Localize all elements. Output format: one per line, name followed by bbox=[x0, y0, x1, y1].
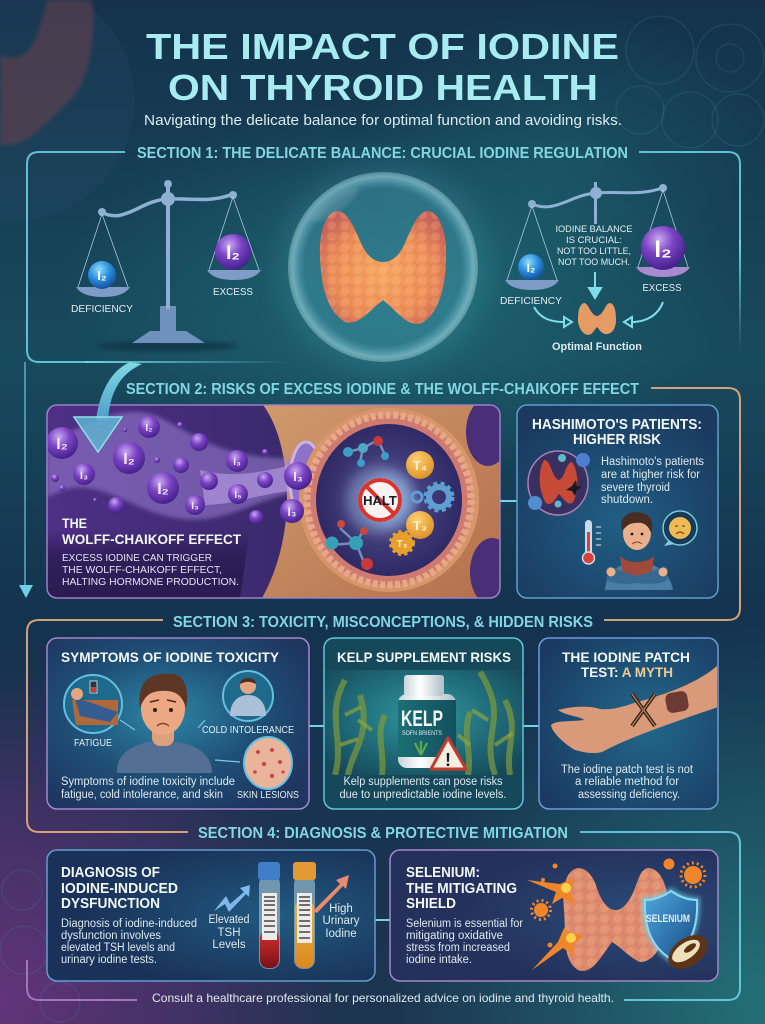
title bbox=[146, 26, 619, 108]
text: patch test description bbox=[561, 764, 694, 801]
text: Hashimoto's description: are at higher risk for bbox=[601, 469, 700, 481]
text: kelp description: due to unpredictable iodine levels. bbox=[340, 789, 506, 801]
text: diagnosis description: Diagnosis of iodine-induced bbox=[61, 918, 197, 930]
heading: patch test: THE IODINE PATCH bbox=[562, 649, 690, 665]
text: symptoms description: Symptoms of iodine toxicity include bbox=[61, 776, 235, 788]
section 3 heading: SECTION 3: TOXICITY, MISCONCEPTIONS, & HIDDEN RISKS bbox=[173, 614, 593, 631]
section 2 heading: SECTION 2: RISKS OF EXCESS IODINE & THE WOLFF-CHAIKOFF EFFECT bbox=[126, 381, 639, 398]
icon: fatigue bbox=[64, 675, 240, 762]
text: kelp description: Kelp supplements can pose risks bbox=[344, 776, 503, 788]
icon: iodine excess sphere bbox=[215, 234, 251, 270]
label: high urinary iodine: High bbox=[329, 903, 353, 915]
subtitle: Navigating the delicate balance for optimal function and avoiding risks. bbox=[144, 113, 622, 129]
icon: brazil nut bbox=[662, 928, 714, 976]
label: elevated TSH bbox=[208, 914, 250, 951]
panel: Wolff-Chaikoff effect: I₂ bbox=[56, 436, 68, 453]
panel: kelp supplement risks bbox=[324, 638, 523, 809]
iodine spheres bbox=[46, 416, 312, 524]
icon: selenium shield: SELENIUM bbox=[646, 913, 690, 925]
heading: diagnosis bbox=[61, 865, 178, 912]
icon: iodine deficiency sphere bbox=[88, 261, 116, 289]
footer note: Consult a healthcare professional for personalized advice on iodine and thyroid health. bbox=[152, 991, 614, 1005]
label: high urinary iodine bbox=[322, 903, 360, 940]
text: diagnosis description: dysfunction involves bbox=[61, 930, 161, 942]
panel: Hashimoto's patients bbox=[517, 405, 718, 598]
text: selenium description: stress from increased bbox=[406, 942, 510, 954]
icon: large excess sphere: I₂ bbox=[654, 236, 672, 263]
text: Wolff-Chaikoff description: HALTING HORMONE PRODUCTION. bbox=[62, 576, 239, 588]
panel: symptoms of iodine toxicity bbox=[47, 638, 309, 809]
label: elevated TSH: Levels bbox=[212, 939, 246, 951]
panel: Wolff-Chaikoff effect bbox=[46, 398, 514, 606]
panel: iodine patch test myth bbox=[539, 638, 718, 809]
connector bbox=[500, 500, 517, 502]
text: selenium description: iodine intake. bbox=[406, 954, 472, 966]
arrow: excess to thyroid bbox=[624, 302, 663, 327]
icon: warning triangle: ! bbox=[445, 750, 451, 770]
heading: selenium: THE MITIGATING bbox=[406, 881, 517, 897]
big arrow into section 2 bbox=[74, 362, 142, 452]
label: high urinary iodine: Urinary bbox=[322, 915, 360, 927]
illustration: kelp bottle under water: SOFN BRIENTS bbox=[402, 730, 443, 737]
text: Hashimoto's description: Hashimoto's patients bbox=[601, 456, 704, 468]
text: symptoms description: fatigue, cold intolerance, and skin bbox=[61, 789, 223, 801]
panel: Wolff-Chaikoff effect: I₃ bbox=[293, 469, 303, 484]
icon: blood test tube bbox=[258, 862, 280, 969]
section 3 frame bbox=[27, 620, 188, 832]
section 1 frame bbox=[27, 152, 740, 362]
icon: selenium shield bbox=[642, 887, 700, 963]
panel: Wolff-Chaikoff effect: I₅ bbox=[234, 490, 242, 501]
heading: Hashimoto's: HASHIMOTO'S PATIENTS: bbox=[532, 417, 702, 433]
icon: small deficiency sphere: I₂ bbox=[527, 261, 535, 275]
icon: high urinary arrow bbox=[313, 875, 349, 913]
heading: kelp: KELP SUPPLEMENT RISKS bbox=[337, 649, 511, 665]
heading: Hashimoto's: HIGHER RISK bbox=[573, 432, 661, 448]
icon: inflamed thyroid bbox=[528, 451, 590, 515]
arrow: balance to thyroid bbox=[589, 272, 601, 298]
icon: thermometer bbox=[582, 520, 601, 564]
heading: selenium bbox=[406, 865, 517, 912]
label: deficiency: DEFICIENCY bbox=[500, 296, 562, 307]
icon: elevated TSH arrow bbox=[214, 885, 250, 912]
connectors bbox=[309, 725, 539, 727]
callout: iodine balance: NOT TOO LITTLE, bbox=[557, 246, 631, 257]
text: selenium description: Selenium is essential for bbox=[406, 918, 523, 930]
text: Wolff-Chaikoff description bbox=[62, 552, 239, 588]
illustration: kelp bottle under water bbox=[325, 665, 522, 777]
icon: urine test tube bbox=[293, 862, 316, 969]
icon: warning triangle bbox=[431, 738, 466, 770]
callout: iodine balance bbox=[556, 224, 632, 268]
illustration: thyroid bbox=[563, 868, 668, 971]
icon: hormones and halt sign: HALT bbox=[363, 493, 397, 508]
label: excess: EXCESS bbox=[642, 283, 682, 294]
connector bbox=[375, 919, 390, 921]
label: high urinary iodine: Iodine bbox=[325, 928, 357, 940]
section 1 heading: SECTION 1: THE DELICATE BALANCE: CRUCIAL IODINE REGULATION bbox=[137, 145, 628, 162]
icon: iodine excess sphere: I₂ bbox=[226, 243, 240, 264]
icon: hormones and halt sign: T₃ bbox=[413, 518, 427, 533]
illustration: kelp bottle under water: KELP bbox=[401, 706, 443, 731]
section 2 frame bbox=[604, 388, 740, 620]
text: patch test description: assessing deficiency. bbox=[578, 789, 680, 801]
label: excess: EXCESS bbox=[213, 287, 253, 298]
heading: Hashimoto's bbox=[532, 417, 702, 448]
side arrow bbox=[19, 362, 33, 598]
heading: the Wolff-Chaikoff effect: WOLFF-CHAIKOFF EFFECT bbox=[62, 531, 241, 547]
label: deficiency: DEFICIENCY bbox=[71, 304, 133, 315]
text: diagnosis description: urinary iodine tests. bbox=[61, 954, 157, 966]
heading: diagnosis: IODINE-INDUCED bbox=[61, 881, 178, 897]
heading: symptoms: SYMPTOMS OF IODINE TOXICITY bbox=[61, 649, 280, 665]
section 4 frame bbox=[27, 832, 740, 1000]
right balance scale bbox=[500, 182, 690, 353]
icon: oxidative stress sparks bbox=[527, 858, 705, 970]
panel: Wolff-Chaikoff effect: I₂ bbox=[145, 423, 153, 434]
heading: selenium: SHIELD bbox=[406, 896, 456, 912]
icon: sad emoji bubble bbox=[663, 511, 697, 546]
label: cold intolerance: COLD INTOLERANCE bbox=[202, 725, 294, 736]
central thyroid bubble bbox=[279, 161, 491, 373]
section 4 heading: SECTION 4: DIAGNOSIS & PROTECTIVE MITIGATION bbox=[198, 825, 568, 842]
text: kelp description bbox=[340, 776, 506, 801]
heading: the Wolff-Chaikoff effect bbox=[62, 515, 241, 547]
title: THE IMPACT OF IODINE bbox=[146, 26, 619, 67]
icon: mini thyroid bbox=[578, 303, 616, 335]
panel: Wolff-Chaikoff effect: I₃ bbox=[80, 470, 88, 482]
icon: cold person bbox=[605, 512, 673, 590]
callout: iodine balance: IODINE BALANCE bbox=[556, 224, 632, 235]
heading: patch test bbox=[562, 649, 690, 680]
text: Hashimoto's description: severe thyroid bbox=[601, 482, 670, 494]
panel: Wolff-Chaikoff effect: I₂ bbox=[123, 451, 135, 468]
icon: person bbox=[117, 674, 212, 773]
label: elevated TSH: Elevated bbox=[208, 914, 250, 926]
text: selenium description bbox=[406, 918, 523, 966]
label: skin lesions: SKIN LESIONS bbox=[237, 790, 299, 801]
icon: hormones and halt sign: T₃ bbox=[397, 539, 408, 550]
callout: iodine balance: IS CRUCIAL: bbox=[566, 235, 622, 246]
arrow: deficiency to thyroid bbox=[534, 307, 572, 327]
icon: cold intolerance bbox=[223, 671, 273, 721]
panel: Wolff-Chaikoff effect: I₃ bbox=[191, 501, 199, 512]
left balance scale bbox=[71, 180, 261, 351]
icon: hormones and halt sign: T₄ bbox=[413, 458, 427, 473]
heading: the Wolff-Chaikoff effect: THE bbox=[62, 515, 87, 531]
icon: iodine deficiency sphere: I₂ bbox=[97, 268, 107, 283]
text: diagnosis description: elevated TSH levels and bbox=[61, 942, 175, 954]
text: selenium description: mitigating oxidative bbox=[406, 930, 503, 942]
label: elevated TSH: TSH bbox=[218, 927, 240, 939]
text: symptoms description bbox=[61, 776, 235, 801]
icon: large excess sphere bbox=[641, 226, 685, 270]
illustration: forearm with patch bbox=[551, 665, 718, 753]
panel: Wolff-Chaikoff effect: I₂ bbox=[157, 481, 169, 498]
panel: Wolff-Chaikoff effect: I₃ bbox=[288, 505, 296, 519]
label: optimal function: Optimal Function bbox=[552, 341, 642, 353]
heading: patch test: TEST: A MYTH bbox=[581, 664, 673, 680]
panel: Wolff-Chaikoff effect: I₃ bbox=[233, 457, 241, 468]
heading: diagnosis: DIAGNOSIS OF bbox=[61, 865, 160, 881]
text: Hashimoto's description bbox=[601, 456, 704, 506]
label: fatigue: FATIGUE bbox=[74, 738, 112, 749]
panel: selenium shield bbox=[390, 850, 718, 981]
text: patch test description: a reliable method for bbox=[575, 776, 679, 788]
heading: selenium: SELENIUM: bbox=[406, 865, 480, 881]
icon: hormones and halt sign bbox=[326, 436, 453, 570]
heading: diagnosis: DYSFUNCTION bbox=[61, 896, 160, 912]
title: ON THYROID HEALTH bbox=[168, 67, 598, 108]
panel: diagnosis bbox=[47, 850, 375, 981]
text: Hashimoto's description: shutdown. bbox=[601, 494, 653, 506]
callout: iodine balance: NOT TOO MUCH. bbox=[558, 257, 630, 268]
icon: small deficiency sphere bbox=[518, 254, 544, 280]
text: patch test description: The iodine patch test is not bbox=[561, 764, 694, 776]
text: diagnosis description bbox=[61, 918, 197, 966]
text: Wolff-Chaikoff description: EXCESS IODINE CAN TRIGGER bbox=[62, 552, 212, 564]
icon: skin lesions bbox=[244, 737, 292, 789]
text: Wolff-Chaikoff description: THE WOLFF-CHAIKOFF EFFECT, bbox=[62, 564, 222, 576]
